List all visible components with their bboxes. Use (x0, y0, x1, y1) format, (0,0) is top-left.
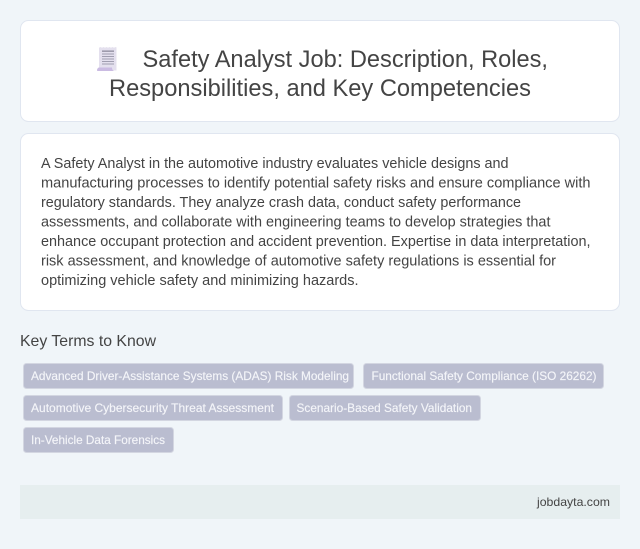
tag: in-vehicle data forensics (24, 428, 174, 452)
panel: description (20, 134, 620, 310)
tag: scenario-based validation: Scenario-Based Safety Validation (296, 401, 472, 415)
tag: in-vehicle data forensics: In-Vehicle Data Forensics (31, 433, 165, 447)
tag: scenario-based validation (290, 396, 480, 420)
tag: cybersecurity threat assessment: Automotive Cybersecurity Threat Assessment (31, 401, 275, 415)
text block: description paragraph (41, 156, 590, 289)
tag list: key terms (24, 364, 604, 452)
footer (20, 485, 620, 519)
tag: ADAS risk modeling: Advanced Driver-Assistance Systems (ADAS) Risk Modeling (31, 369, 349, 383)
footer: jobdayta.com (536, 495, 610, 509)
tag: functional safety compliance (364, 364, 604, 388)
tag: functional safety compliance: Functional Safety Compliance (ISO 26262) (372, 369, 596, 383)
text block: description paragraph: A Safety Analyst in the automotive industry evaluates vehicle designs and (41, 156, 508, 172)
panel: title header (20, 20, 620, 122)
text block: description paragraph: risk assessment, and knowledge of automotive safety regulations is essential for (41, 254, 556, 270)
text block: description paragraph: manufacturing processes to identify potential safety risks and ensure compliance with (41, 176, 590, 192)
tag: ADAS risk modeling (24, 364, 354, 388)
text block: description paragraph: regulatory standards. They analyze crash data, conduct safety performance (41, 195, 521, 211)
text block: description paragraph: assessments, and collaborate with engineering teams to develop strategies that (41, 214, 550, 230)
heading: title: Responsibilities, and Key Competencies (109, 75, 531, 102)
heading: key terms: Key Terms to Know (20, 333, 156, 350)
text block: description paragraph: enhance occupant protection and accident prevention. Expertise in data interpretation, (41, 234, 590, 250)
icon: document scroll (97, 47, 117, 71)
heading: title: Safety Analyst Job: Description, Roles, (142, 46, 548, 73)
tag: cybersecurity threat assessment (24, 396, 282, 420)
text block: description paragraph: optimizing vehicle safety and minimizing hazards. (41, 273, 358, 289)
heading: title (109, 46, 548, 102)
